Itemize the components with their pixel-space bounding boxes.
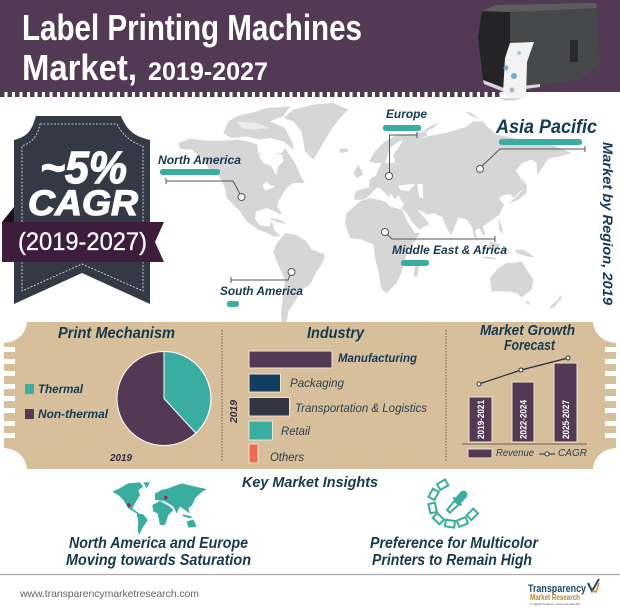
map: old world bbox=[345, 98, 572, 310]
insight: preference for multicolor: Preference for Multicolor bbox=[370, 535, 539, 552]
chart: revenue bars bbox=[462, 363, 587, 444]
badge: ~5% CAGR: ~5% bbox=[40, 142, 127, 193]
bar labels: Transportation & Logistics bbox=[295, 403, 427, 415]
vertical label: market by region: Market by Region, 2019 bbox=[600, 142, 615, 306]
heading: print mechanism: Print Mechanism bbox=[58, 325, 175, 342]
insight: North America and Europe: North America and Europe bbox=[69, 535, 248, 552]
heading: key market insights: Key Market Insights bbox=[242, 474, 378, 491]
world map bbox=[178, 103, 348, 322]
region: South America bbox=[220, 268, 303, 307]
badge: ~5% CAGR: CAGR bbox=[28, 184, 139, 223]
badge: ~5% CAGR: (2019-2027) bbox=[18, 228, 147, 256]
chart: revenue bars: 2022-2024 bbox=[518, 399, 530, 439]
bar labels bbox=[270, 351, 427, 464]
badge: ~5% CAGR bbox=[2, 116, 164, 304]
region: Asia Pacific bbox=[476, 117, 597, 172]
chart: revenue bars: 2019-2021 bbox=[476, 399, 487, 439]
bar labels: Manufacturing bbox=[338, 351, 418, 365]
pie year: 2019 bbox=[109, 452, 132, 464]
bar chart: industry bbox=[249, 351, 332, 463]
region: Asia Pacific: Asia Pacific bbox=[495, 117, 597, 138]
legend: revenue and CAGR: Revenue bbox=[496, 447, 534, 459]
insight: preference for multicolor bbox=[370, 535, 539, 569]
icon: label printer bbox=[478, 3, 600, 99]
icon: color swatch ring with dropper bbox=[428, 479, 478, 528]
bar labels: Packaging bbox=[290, 378, 345, 390]
region: Middle East and Africa: Middle East & Africa bbox=[392, 243, 507, 257]
logo: Transparency Market Research: In-depth Analysis. Accurate Results bbox=[530, 602, 581, 606]
region: North America bbox=[158, 153, 245, 200]
region: South America: South America bbox=[220, 284, 303, 298]
logo: Transparency Market Research bbox=[528, 579, 599, 606]
insight: North America and Europe: Moving towards Saturation bbox=[66, 552, 251, 569]
panel: market growth forecast bbox=[462, 322, 587, 459]
legend: mechanism types: Thermal bbox=[38, 382, 84, 396]
region: Europe: Europe bbox=[386, 107, 427, 121]
footer rule bbox=[0, 574, 620, 576]
header banner bbox=[0, 0, 620, 94]
heading: market growth forecast: Forecast bbox=[504, 337, 556, 354]
map: inner seas bbox=[385, 140, 423, 198]
insight: preference for multicolor: Printers to Remain High bbox=[372, 552, 532, 569]
bar labels: Others bbox=[270, 452, 304, 464]
title: 2019-2027 bbox=[148, 58, 268, 86]
title bbox=[22, 7, 362, 88]
region: Middle East and Africa bbox=[382, 228, 507, 266]
website url: www.transparencymarketresearch.com bbox=[19, 588, 199, 600]
heading: market growth forecast: Market Growth bbox=[480, 322, 575, 339]
legend: mechanism types bbox=[25, 382, 109, 421]
ticket panel background bbox=[4, 322, 616, 469]
insight: North America and Europe bbox=[66, 535, 251, 569]
region: Europe bbox=[383, 107, 427, 180]
axis year: 2019 bbox=[229, 400, 240, 424]
logo: Transparency Market Research: Market Research bbox=[530, 592, 580, 602]
icon: teal world map bbox=[112, 482, 207, 534]
heading: industry: Industry bbox=[307, 325, 365, 342]
panel: industry bbox=[229, 325, 427, 464]
title: Label Printing Machines bbox=[22, 7, 362, 48]
region: North America: North America bbox=[158, 153, 241, 167]
title: Market, bbox=[22, 47, 137, 88]
map: seas and lakes bbox=[237, 121, 283, 191]
bar labels: Retail bbox=[281, 426, 310, 438]
heading: market growth forecast bbox=[480, 322, 575, 354]
legend: revenue and CAGR bbox=[468, 447, 587, 459]
panel: print mechanism bbox=[25, 325, 211, 464]
legend: revenue and CAGR: CAGR bbox=[558, 447, 587, 459]
chart: CAGR line bbox=[477, 356, 570, 386]
chart: revenue bars: 2025-2027 bbox=[561, 400, 572, 439]
legend: mechanism types: Non-thermal bbox=[38, 407, 109, 421]
pie chart bbox=[117, 352, 211, 446]
logo: Transparency Market Research: Transparency bbox=[528, 583, 587, 595]
